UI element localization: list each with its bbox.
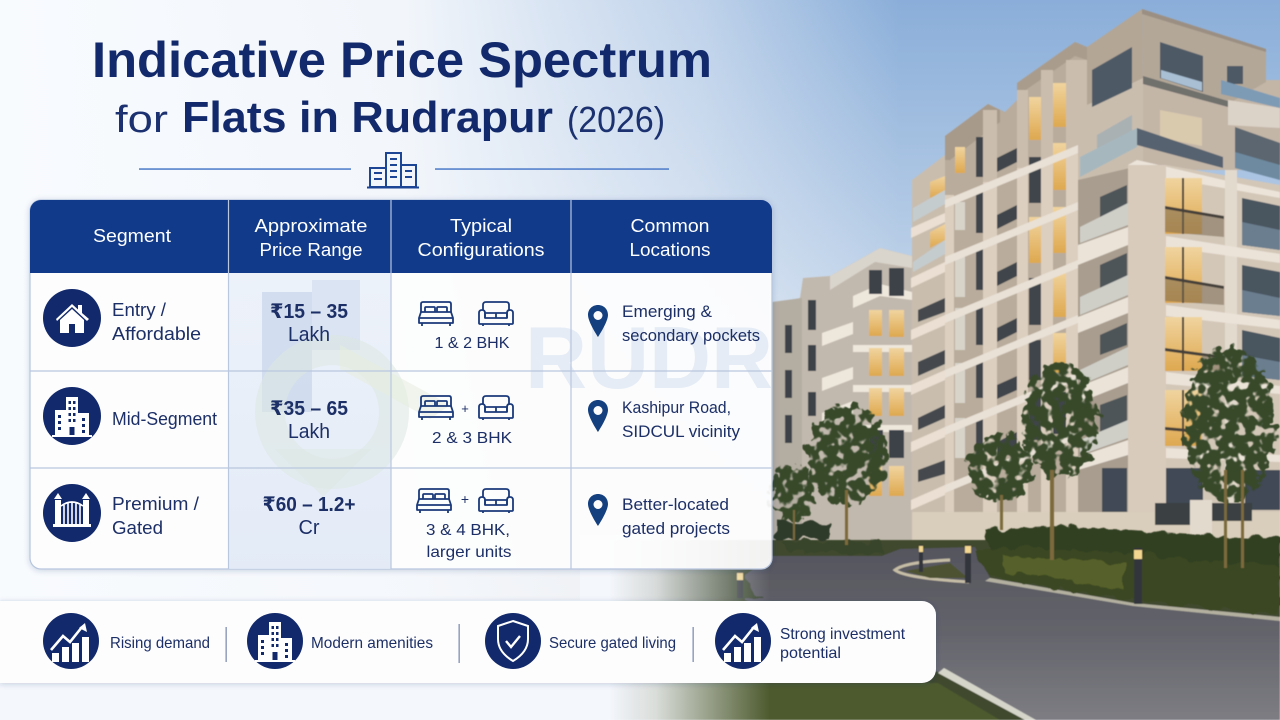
row: mid-segment: 2 & 3 BHK <box>432 430 512 447</box>
row: premium / gated: 3 & 4 BHK, <box>426 522 510 539</box>
panel: benefits strip <box>0 601 936 683</box>
row: entry / affordable <box>43 289 760 352</box>
heading divider with building icon <box>139 153 669 188</box>
back building <box>772 248 912 545</box>
row: mid-segment: Mid-Segment <box>112 408 217 429</box>
table header: Price Range <box>260 239 362 260</box>
table header: Segment <box>93 225 171 246</box>
icon: city buildings <box>367 153 419 188</box>
right facade <box>1166 165 1280 530</box>
icon: modern amenities building <box>247 613 303 669</box>
row: mid-segment: ₹35 – 65 <box>270 398 348 420</box>
row: premium / gated: + <box>461 491 469 507</box>
heading: Flats in Rudrapur <box>182 93 553 142</box>
trees <box>771 347 1275 521</box>
icon: investment chart <box>715 613 771 669</box>
panel: benefits strip: Secure gated living <box>549 635 676 652</box>
watermark logo <box>262 280 773 497</box>
central windows <box>955 83 1066 373</box>
table header <box>30 200 772 273</box>
heading: Indicative Price Spectrum <box>92 32 712 88</box>
row: premium / gated: Cr <box>298 517 320 539</box>
heading: (2026) <box>567 99 665 140</box>
row: entry / affordable: Lakh <box>288 324 330 346</box>
row: entry / affordable: Entry / <box>112 299 167 320</box>
row: entry / affordable: 1 & 2 BHK <box>434 335 510 352</box>
left fade over ground <box>580 535 770 720</box>
table header: Configurations <box>418 239 544 260</box>
icon: shield <box>485 613 541 669</box>
row: premium / gated: gated projects <box>622 519 730 538</box>
central piers <box>945 150 1078 530</box>
heading: for <box>115 99 168 141</box>
photo: ground, road and landscaping <box>610 347 1280 720</box>
hedges <box>640 520 1280 615</box>
heading <box>92 32 712 142</box>
row: premium / gated: Premium / <box>112 493 200 514</box>
panel: benefits strip: potential <box>780 645 841 662</box>
row: mid-segment <box>43 387 740 447</box>
row: entry / affordable: Emerging & <box>622 302 713 321</box>
central facade base <box>945 42 1087 530</box>
icon: building <box>43 387 101 445</box>
row: premium / gated: Better-located <box>622 495 729 514</box>
table header: Common <box>630 215 710 236</box>
panel: benefits strip: Modern amenities <box>311 635 433 652</box>
central floor slabs <box>945 145 1078 493</box>
photo: apartment buildings <box>772 9 1280 545</box>
icon: rising demand chart <box>43 613 99 669</box>
top block and upper storeys <box>1143 80 1280 170</box>
panel: benefits strip: Rising demand <box>110 635 210 652</box>
row: premium / gated <box>43 484 730 561</box>
row: entry / affordable: ₹15 – 35 <box>270 301 348 323</box>
row: entry / affordable: Affordable <box>112 323 201 344</box>
row: mid-segment: + <box>461 401 469 416</box>
table header: Locations <box>630 239 710 260</box>
row: premium / gated: ₹60 – 1.2+ <box>262 494 356 516</box>
panel: price table <box>30 200 773 569</box>
table header: Approximate <box>254 215 368 236</box>
column 2 tint <box>229 273 391 569</box>
icon: house <box>43 289 101 347</box>
table header: Typical <box>450 215 512 236</box>
lamp posts <box>737 545 1142 604</box>
row: mid-segment: Kashipur Road, <box>622 399 731 417</box>
row: mid-segment: Lakh <box>288 421 330 443</box>
row: premium / gated: larger units <box>426 544 512 561</box>
panel: benefits strip: Strong investment <box>780 626 906 643</box>
left wing of main building <box>912 155 945 530</box>
balcony bay <box>1078 135 1128 530</box>
watermark logo: RUDR <box>525 308 773 407</box>
row: premium / gated: Gated <box>112 517 163 538</box>
row: entry / affordable: secondary pockets <box>622 326 760 345</box>
icon: gate <box>43 484 101 542</box>
row: mid-segment: SIDCUL vicinity <box>622 422 740 441</box>
